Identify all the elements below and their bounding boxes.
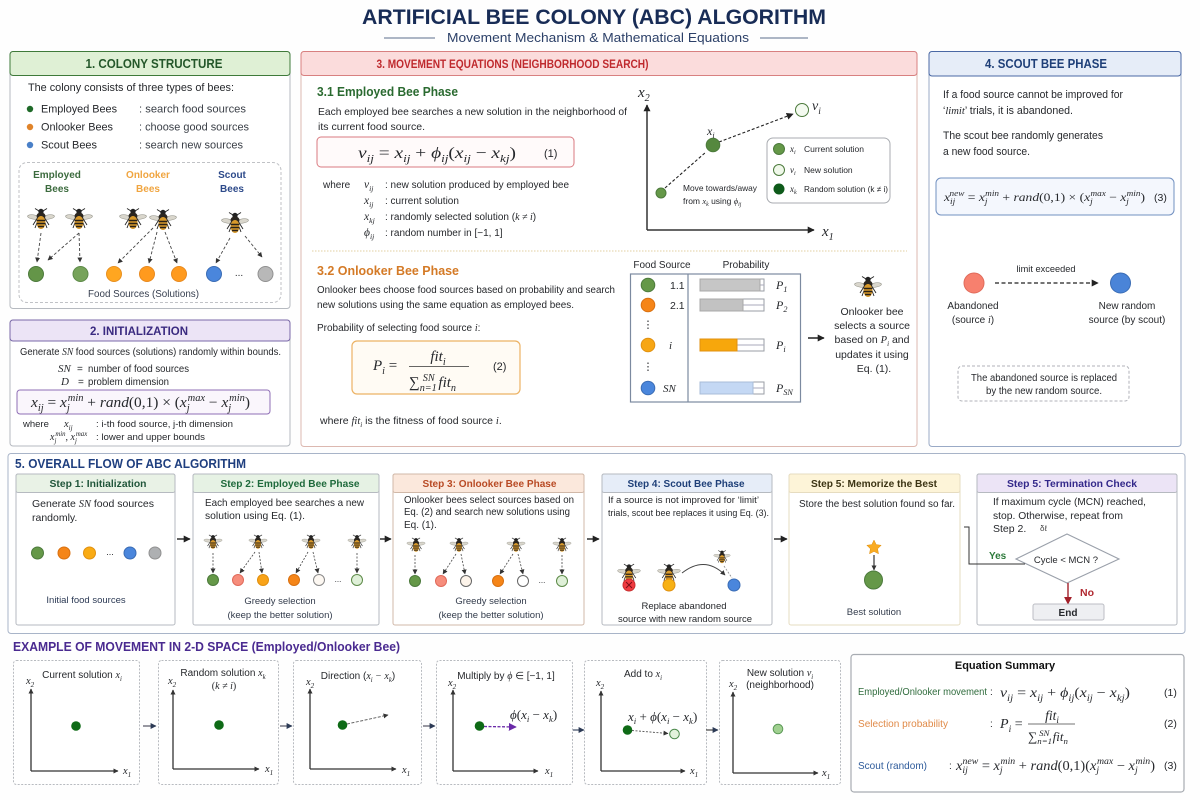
panel: movement equations [301,52,917,446]
step 1 [16,474,175,625]
equation row 2: ∑n=1SN fitn [1028,728,1068,746]
colony diagram: ... [235,268,243,279]
probability table [630,260,800,402]
equation row 2: : [990,719,993,730]
example panel: new solution [720,660,840,784]
definitions: D [60,376,69,388]
onlooker phase description: Onlooker bees choose food sources based on probability and search [317,285,615,296]
step 4: Replace abandoned [641,601,727,612]
heading: initialization [10,320,290,341]
example panel: current solution: x1 [122,766,131,779]
equation row 1: (1) [1164,687,1177,699]
equation box: scout: xijnew = xjmin + rand (0,1) × ( xjmax − xjmin) [943,189,1145,206]
chart: employed bee search: vi [812,99,821,117]
example panel: new solution: (neighborhood) [746,680,814,691]
heading: equation summary: Equation Summary [955,660,1056,672]
chart legend: Current solution [804,144,864,154]
arrow: table to onlooker note [808,337,824,339]
step 6: termination: No [1080,587,1094,599]
example panel: add [584,660,706,784]
equation box: initialization: xij = xjmin + rand(0,1) × (xjmax − xjmin) [30,393,250,414]
diagram: source replacement: New random [1099,301,1155,312]
definitions: SN [58,363,72,375]
diagram: source replacement [947,264,1165,326]
chart legend [767,138,890,203]
probability table: ⋮ [643,319,653,331]
step 3: Eq. (1). [404,520,437,531]
example panel: multiply: ϕ(xi − xk) [510,707,557,724]
diagram: source replacement: (source i) [952,315,994,326]
equation row 1: vij = xij + ϕij(xij − xkj) [1000,686,1130,704]
equation box: movement: vij = xij + ϕij(xij − xkj) [358,145,516,165]
chart: employed bee search: xi [706,124,715,140]
step 6: termination: If maximum cycle (MCN) reached, [993,496,1146,508]
step 2: solution using Eq. (1). [205,510,305,522]
step 2: Greedy selection [244,596,316,607]
step 6: termination: δℓ [1040,524,1047,533]
equation box: selection probability: fiti [430,349,446,368]
definitions: number of food sources [88,364,189,375]
equation row 3: Scout (random) [858,760,927,772]
variable definitions: xij [363,195,373,209]
example panel: multiply: Multiply by ϕ ∈ [−1, 1] [457,671,555,682]
heading: scout bee phase [929,52,1181,76]
example panel: multiply: x1 [544,766,553,779]
scout note: by the new random source. [986,386,1102,397]
example panel: direction: Direction (xi − xk) [321,671,395,684]
where notes: : lower and upper bounds [96,432,205,443]
example panel: add: Add to xi [624,669,662,682]
colony intro text: The colony consists of three types of bees: [28,82,234,94]
example panel: random solution: x2 [167,676,177,689]
where notes: : i-th food source, j-th dimension [96,419,233,430]
employed phase description [318,106,627,133]
scout description [943,89,1123,158]
step 4: source with new random source [618,614,752,625]
probability table: P2 [775,298,787,314]
chart: employed bee search: x1 [821,224,834,243]
step 3: ... [539,576,545,585]
bee type list: Employed Bees [41,104,117,116]
step 2: Step 2: Employed Bee Phase [220,478,360,490]
example panel: new solution: New solution vi [747,668,813,681]
equation row 2 [858,708,1177,746]
title: ARTIFICIAL BEE COLONY (ABC) ALGORITHM [362,6,826,29]
step 6: termination: Yes [989,551,1007,562]
heading: scout bee phase: 4. SCOUT BEE PHASE [985,57,1107,71]
bee type list: Onlooker Bees [41,122,113,134]
scout description: The scout bee randomly generates [943,130,1103,142]
example panel: add: xi + ϕ(xi − xk) [627,709,697,726]
chart legend: xi [789,144,796,156]
scout description: If a food source cannot be improved for [943,89,1123,101]
diagram: source replacement: Abandoned [947,301,999,312]
equation row 1: : [990,687,993,698]
step 6: termination: End [1059,608,1077,619]
example panel: direction [294,660,422,784]
definitions [58,363,189,388]
onlooker phase description: Probability of selecting food source i: [317,323,480,334]
step 4 [602,474,772,625]
equation box: selection probability: (2) [493,361,506,373]
definitions: = [78,377,84,388]
step 1: ... [106,547,114,557]
equation row 2: fiti [1045,708,1059,725]
panel: initialization [10,320,290,446]
example panel: current solution: Current solution xi [42,670,122,683]
colony diagram: Scout [218,170,247,181]
onlooker note: Onlooker bee [840,306,904,318]
fitness note: where fiti is the fitness of food source i. [319,415,502,429]
chart: employed bee search: Move towards/away [683,183,758,193]
step 3: Onlooker bees select sources based on [404,495,574,506]
equation box: selection probability: ∑n=1SN fitn [409,373,456,394]
arrow: step 1 to 2 [177,538,190,540]
employed phase description: Each employed bee searches a new solution in the neighborhood of [318,106,627,118]
arrow: step 4 to 5 [774,538,787,540]
variable definitions: xkj [363,211,375,225]
probability table: PSN [775,381,793,397]
example panel: random solution: (k ≠ i) [212,681,236,692]
onlooker note [834,306,910,375]
arrow: step 2 to 3 [380,538,391,540]
probability table: i [669,340,672,352]
heading: colony structure: 1. COLONY STRUCTURE [86,57,222,71]
probability table: SN [663,383,676,395]
step 5: memorize: Store the best solution found so far. [799,499,955,510]
variable definitions: : random number in [−1, 1] [385,228,503,239]
where notes [22,419,233,445]
step 1: Initial food sources [46,595,126,606]
heading: overall flow: 5. OVERALL FLOW OF ABC ALGORITHM [15,457,246,471]
step 6: termination [964,474,1177,625]
example panel: current solution: x2 [25,676,35,689]
panel: scout bee phase [929,52,1181,446]
example panel: current solution [14,660,140,784]
equation box: movement: (1) [544,148,557,160]
chart legend: vi [790,165,796,177]
probability table: Food Source [633,260,691,271]
step 6: termination: Step 2. [993,523,1026,535]
panel: colony structure [10,52,290,308]
chart legend: xk [789,184,797,196]
onlooker note: Eq. (1). [857,363,891,375]
onlooker phase description: new solutions using the same equation as employed bees. [317,300,574,311]
step 3 [393,474,584,625]
colony diagram: Bees [220,184,244,195]
example panel: new solution: x1 [821,768,830,781]
equation row 3: (3) [1164,760,1177,772]
scout description: a new food source. [943,146,1030,158]
example panel: add: x1 [689,766,698,779]
example panel: add: x2 [595,678,605,691]
equation box: scout [936,178,1174,215]
probability table: 2.1 [670,300,685,312]
colony diagram [19,162,281,302]
chart legend: New solution [804,165,853,175]
variable definitions [322,179,569,241]
scout note [958,366,1129,401]
chart: employed bee search [637,85,890,243]
panel: overall flow [8,454,1185,634]
step 6: termination: Cycle < MCN ? [1034,555,1098,566]
bee type list: Scout Bees [41,140,97,152]
arrow [143,725,156,727]
where notes: xjmin, xjmax [49,431,87,445]
chart legend: Random solution (k ≠ i) [804,184,888,194]
icon: onlooker bee [854,276,882,297]
step 6: termination: Step 5: Termination Check [1007,478,1137,490]
step 2: ... [335,575,341,584]
equation row 2: Selection probability [858,718,949,730]
variable definitions: ϕij [364,227,374,241]
example panel: multiply: x2 [447,678,457,691]
equation row 1: Employed/Onlooker movement [858,687,987,698]
probability table: P1 [775,278,787,294]
bee type list: : search new sources [139,140,243,152]
example panel: direction: x2 [305,677,315,690]
variable definitions: : new solution produced by employed bee [385,180,569,191]
step 5: memorize: Best solution [847,607,901,618]
equation box: scout: (3) [1154,192,1167,204]
variable definitions: where [322,180,351,191]
equation box: selection probability [352,341,520,394]
scout description: ‘limit’ trials, it is abandoned. [943,105,1073,117]
diagram: source replacement: source (by scout) [1089,315,1165,326]
scout note: The abandoned source is replaced [971,373,1117,384]
step 3: Eq. (2) and search new solutions using [404,507,570,518]
step 2: (keep the better solution) [227,610,333,621]
equation row 3: xijnew = xjmin + rand(0,1)(xjmax − xjmin) [955,756,1155,775]
step 1: Step 1: Initialization [50,478,146,490]
heading: colony structure [10,52,290,76]
chart: employed bee search: x2 [637,85,650,104]
equation row 1 [858,686,1177,704]
step 2: Each employed bee searches a new [205,497,364,509]
step 4: If a source is not improved for ‘limit’ [608,495,759,506]
arrow [280,725,292,727]
equation box: movement [317,137,574,167]
step 1: randomly. [32,512,77,524]
step 5: memorize [789,474,960,625]
probability table: Pi [775,338,786,354]
probability table: ⋮ [643,361,653,373]
where notes: where [22,419,49,430]
example panel: new solution: x2 [728,679,738,692]
step 4: trials, scout bee replaces it using Eq. (3). [608,508,769,519]
generation text: Generate SN food sources (solutions) randomly within bounds. [20,347,281,358]
step 1: Generate SN food sources [32,498,154,510]
example panel: random solution: Random solution xk [180,668,267,681]
example panel: random solution [158,660,278,784]
colony diagram: Employed [33,170,81,181]
variable definitions: vij [364,179,373,193]
heading: initialization: 2. INITIALIZATION [90,324,188,338]
arrow [423,725,435,727]
subheading: employed bee phase: 3.1 Employed Bee Phase [317,85,458,99]
chart: employed bee search: from xk using ϕij [683,196,742,208]
step 3: Step 3: Onlooker Bee Phase [422,478,557,490]
colony diagram: Food Sources (Solutions) [88,289,199,300]
step 3: (keep the better solution) [438,610,544,621]
definitions: = [77,364,83,375]
equation row 2: Pi = [999,717,1023,735]
equation box: selection probability: Pi = [372,358,397,377]
onlooker note: based on Pi and [835,334,910,348]
where notes: xij [63,419,73,432]
onlooker note: updates it using [835,349,909,361]
subtitle: Movement Mechanism & Mathematical Equations [447,30,750,45]
step 6: termination: stop. Otherwise, repeat from [993,510,1123,522]
diagram: source replacement: limit exceeded [1016,264,1076,275]
colony diagram: Onlooker [126,170,170,181]
onlooker phase description [317,285,615,334]
equation row 2: (2) [1164,718,1177,730]
step 4: Step 4: Scout Bee Phase [628,478,745,490]
equation row 3 [858,756,1177,775]
panel: equation summary [851,654,1184,792]
probability table: Probability [723,260,769,271]
heading: movement equations: 3. MOVEMENT EQUATIONS (NEIGHBORHOOD SEARCH) [376,57,648,71]
equation row 3: : [949,761,952,772]
arrow [706,729,718,731]
example panel: multiply [436,660,572,784]
bee type list [27,104,249,152]
variable definitions: : current solution [385,196,459,207]
example panel: random solution: x1 [264,764,273,777]
arrow: step 3 to 4 [587,538,599,540]
onlooker note: selects a source [834,320,910,332]
example panel: direction: x1 [401,765,410,778]
step 3: Greedy selection [455,596,527,607]
heading: movement equations [301,52,917,76]
bee type list: : search food sources [139,104,247,116]
colony diagram: Bees [45,184,69,195]
bee type list: : choose good sources [139,122,249,134]
employed phase description: its current food source. [318,121,425,133]
heading: example of movement: EXAMPLE OF MOVEMENT IN 2-D SPACE (Employed/Onlooker Bee) [13,639,400,654]
variable definitions: : randomly selected solution (k ≠ i) [385,212,536,223]
probability table: 1.1 [670,280,685,292]
step 5: memorize: Step 5: Memorize the Best [811,478,937,490]
definitions: problem dimension [88,377,169,388]
arrow [573,729,584,731]
step 2 [193,474,379,625]
subheading: onlooker bee phase: 3.2 Onlooker Bee Phase [317,264,459,278]
colony diagram: Bees [136,184,160,195]
